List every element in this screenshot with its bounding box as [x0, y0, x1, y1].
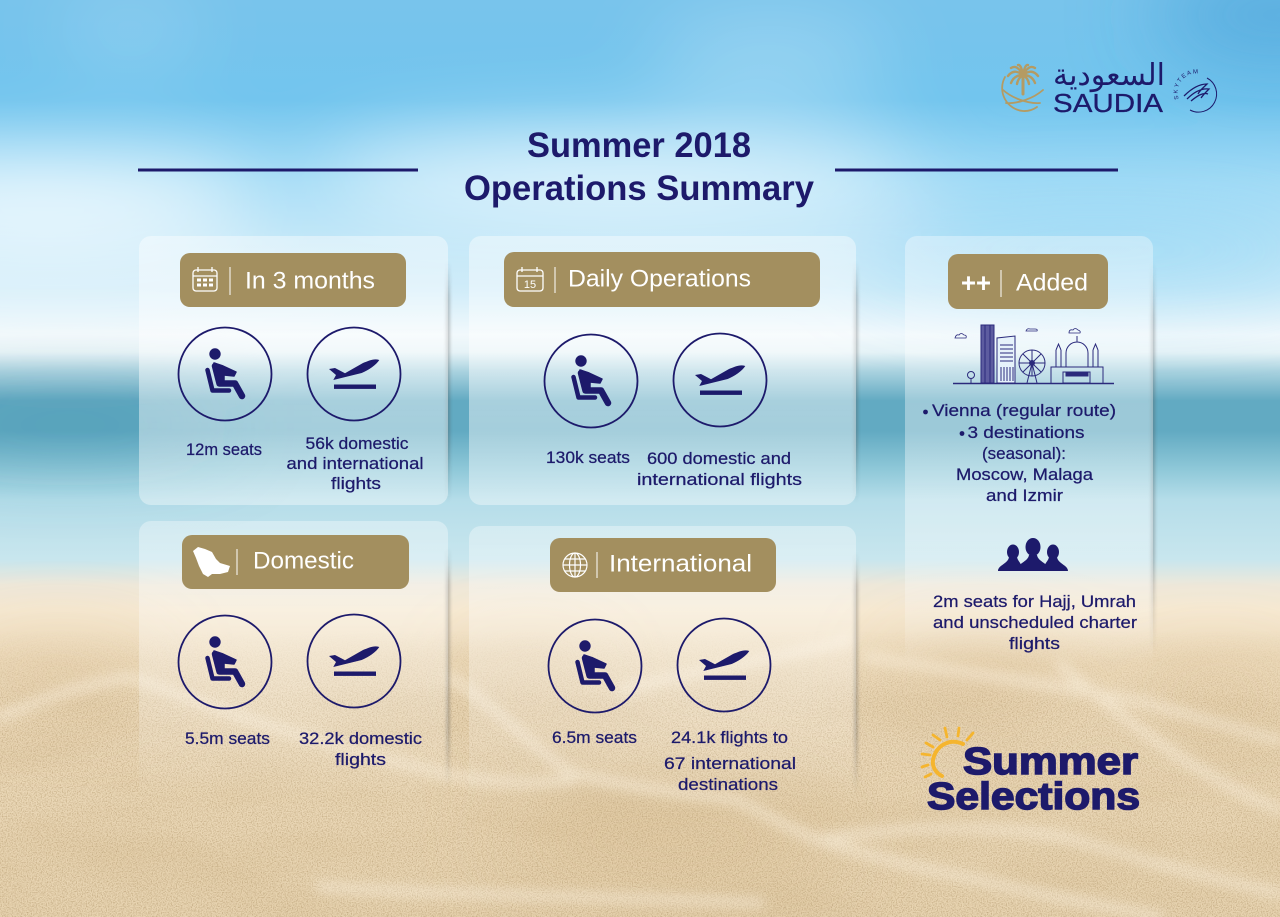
header: daily operations	[504, 252, 820, 307]
added destinations: 3 destinations	[968, 423, 1084, 442]
icon: seat	[178, 328, 272, 420]
added destinations: (seasonal):	[982, 444, 1066, 463]
added destinations: Vienna (regular route)	[932, 401, 1116, 420]
icon: sun	[922, 728, 973, 777]
icon: palm and swords	[1002, 65, 1043, 111]
charter seats text: and unscheduled charter	[933, 613, 1137, 632]
logo: saudia	[1001, 58, 1218, 118]
stat: flights: 56k domestic	[306, 434, 409, 453]
title: Summer 2018	[527, 126, 751, 165]
header: international	[550, 538, 776, 592]
logo: summer selections: Summer	[963, 741, 1138, 783]
charter seats text: 2m seats for Hajj, Umrah	[933, 592, 1136, 611]
icon: plane	[308, 614, 400, 708]
stat: seats: 130k seats	[546, 448, 630, 467]
stat: flights: 600 domestic and	[647, 449, 791, 468]
charter seats text	[933, 592, 1137, 653]
title	[464, 126, 815, 208]
icon: plane	[678, 618, 770, 712]
logo: summer selections	[922, 728, 1140, 818]
icon: seat	[548, 620, 642, 712]
stat: flights: flights	[331, 474, 381, 493]
panel: added	[905, 236, 1154, 666]
header: daily operations: Daily Operations	[568, 266, 751, 292]
stat: flights: 67 international	[664, 754, 796, 773]
icon: skyteam	[1173, 69, 1218, 113]
stat: seats: 6.5m seats	[552, 728, 637, 747]
stat: seats: 12m seats	[186, 440, 262, 459]
icon: calendar	[193, 267, 217, 291]
stat: flights: 24.1k flights to	[671, 728, 788, 747]
icon: city skyline	[953, 325, 1114, 384]
icon: seat	[544, 334, 638, 428]
stat: flights: destinations	[678, 775, 778, 794]
panel: daily operations	[469, 236, 858, 505]
charter seats text: flights	[1009, 634, 1060, 653]
icon: plane	[308, 328, 400, 420]
icon: people	[998, 538, 1068, 571]
saudia wordmark: SAUDIA	[1053, 88, 1164, 118]
stat: flights: international flights	[637, 470, 802, 489]
panel: international	[469, 526, 858, 806]
icon: seat	[178, 616, 272, 708]
logo: summer selections: Selections	[927, 776, 1140, 818]
icon: calendar 15	[517, 267, 543, 291]
stat: flights	[286, 434, 424, 493]
header: in 3 months: In 3 months	[245, 268, 375, 294]
title: Operations Summary	[464, 169, 815, 208]
header: domestic: Domestic	[253, 548, 354, 574]
header: in 3 months	[180, 253, 406, 307]
icon: skyteam: SKYTEAM	[1173, 69, 1198, 100]
stat: flights: and international	[286, 454, 424, 473]
stat: flights: flights	[335, 750, 386, 769]
icon: plane	[674, 334, 766, 426]
header: international: International	[609, 550, 752, 578]
header: added: Added	[1016, 270, 1088, 296]
added destinations: Moscow, Malaga	[956, 465, 1094, 484]
added destinations	[923, 401, 1116, 505]
arabic wordmark: السعودية	[1053, 58, 1165, 93]
header: domestic	[182, 535, 409, 589]
icon: saudi map	[193, 547, 230, 577]
stat: flights	[299, 729, 423, 769]
icon: calendar 15: 15	[524, 279, 536, 291]
sand ridges	[0, 640, 1280, 917]
panel: in 3 months	[139, 236, 450, 505]
stat: flights	[637, 449, 802, 489]
icon: plus signs: ++	[961, 268, 991, 298]
stat: flights	[664, 728, 796, 794]
stat: flights: 32.2k domestic	[299, 729, 423, 748]
stat: seats: 5.5m seats	[185, 729, 270, 748]
header: added	[948, 254, 1108, 309]
icon: globe	[563, 553, 587, 577]
panel: domestic	[139, 521, 450, 801]
added destinations: and Izmir	[986, 486, 1063, 505]
